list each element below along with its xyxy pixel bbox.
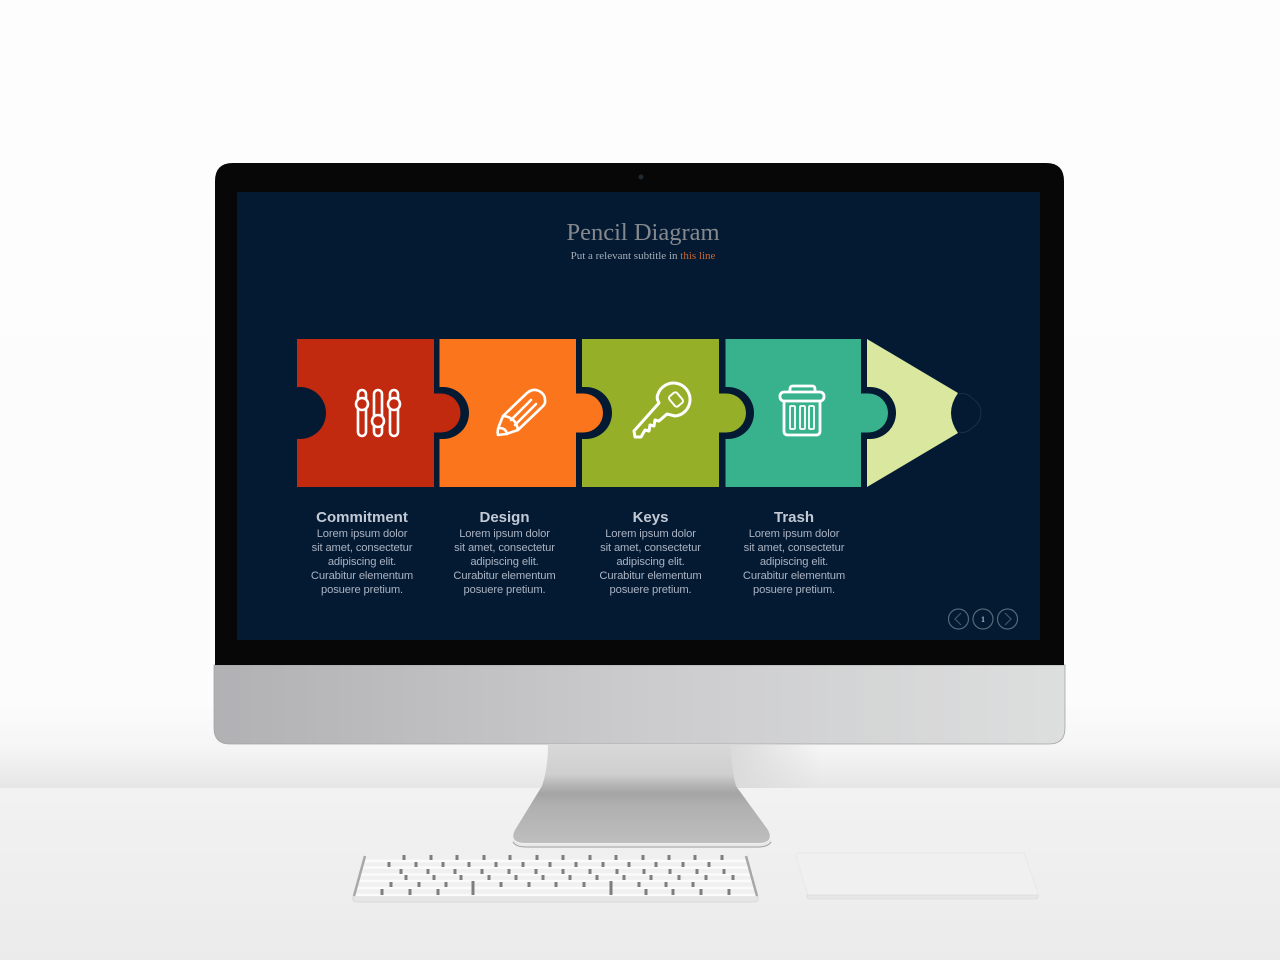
title: Pencil Diagram — [566, 219, 720, 246]
pagination controls — [948, 609, 1018, 629]
text block: Trash: Curabitur elementum — [743, 570, 845, 582]
subtitle: Put a relevant subtitle in this line — [571, 250, 716, 262]
text block: Keys: posuere pretium. — [609, 584, 692, 596]
text block: Design: sit amet, consectetur — [454, 542, 555, 554]
text block: Commitment: Lorem ipsum dolor — [317, 528, 408, 540]
icon: pencil — [498, 390, 545, 435]
text block: Commitment: Commitment — [316, 509, 408, 526]
piece: red — [297, 339, 460, 487]
text block: Design: Design — [479, 509, 530, 526]
text block: Design — [453, 509, 556, 596]
piece: orange — [440, 339, 603, 487]
piece: pencil tip — [867, 339, 981, 487]
keyboard — [353, 855, 758, 902]
text block: Trash: sit amet, consectetur — [744, 542, 845, 554]
text block: Trash — [743, 509, 845, 596]
text block: Design: Lorem ipsum dolor — [459, 528, 550, 540]
monitor — [214, 163, 1065, 847]
text block: Design: adipiscing elit. — [470, 556, 539, 568]
text block: Commitment: sit amet, consectetur — [312, 542, 413, 554]
text block: Design: Curabitur elementum — [453, 570, 556, 582]
text block: Trash: adipiscing elit. — [760, 556, 828, 568]
text block: Trash: Trash — [774, 509, 814, 526]
slide screen — [237, 192, 1040, 640]
text block: Trash: Lorem ipsum dolor — [749, 528, 840, 540]
piece: teal — [726, 339, 888, 487]
text block: Keys: Curabitur elementum — [599, 570, 702, 582]
text block: Commitment — [311, 509, 413, 596]
text block: Keys: Lorem ipsum dolor — [605, 528, 696, 540]
text block: Commitment: posuere pretium. — [321, 584, 403, 596]
pagination controls: 1 — [981, 615, 985, 624]
text block: Commitment: Curabitur elementum — [311, 570, 413, 582]
monitor bezel — [215, 163, 1064, 665]
monitor chin — [214, 665, 1065, 744]
text block: Commitment: adipiscing elit. — [328, 556, 396, 568]
text block: Keys: adipiscing elit. — [616, 556, 685, 568]
text block: Design: posuere pretium. — [463, 584, 546, 596]
piece: green — [582, 339, 746, 487]
trackpad — [797, 853, 1038, 899]
webcam — [638, 174, 644, 180]
icon: trash — [780, 386, 824, 435]
pencil diagram — [297, 339, 981, 487]
icon: key — [634, 383, 690, 437]
icon: sliders — [356, 390, 400, 436]
monitor stand — [513, 745, 771, 847]
text block: Keys: sit amet, consectetur — [600, 542, 701, 554]
text block: Trash: posuere pretium. — [753, 584, 835, 596]
text block: Keys — [599, 509, 702, 596]
text block: Keys: Keys — [633, 509, 668, 526]
